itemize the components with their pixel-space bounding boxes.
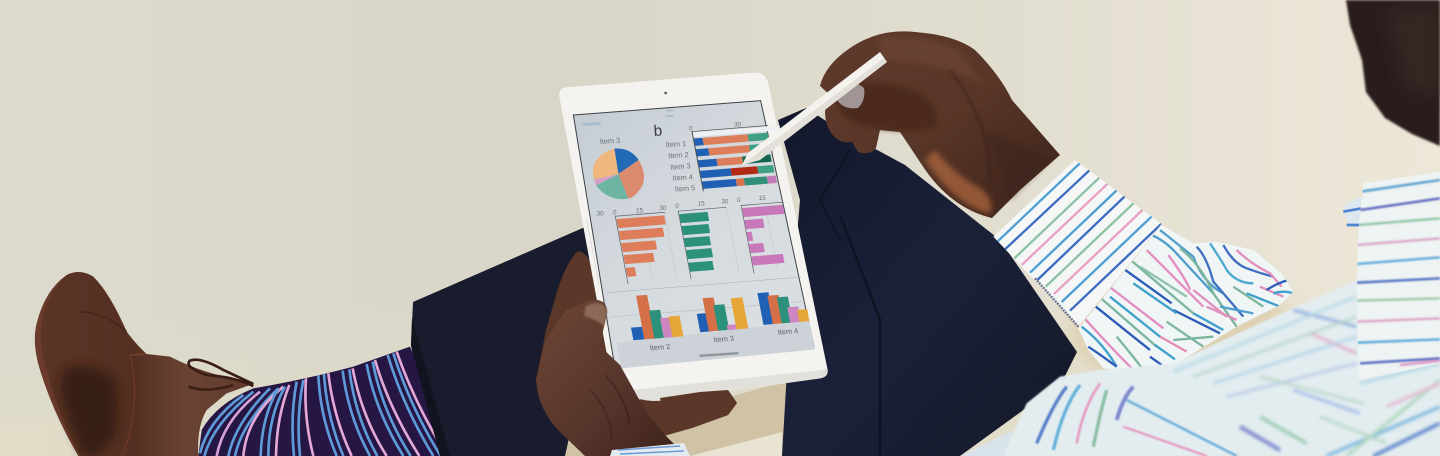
axis numbers: 30: [659, 205, 667, 212]
row labels: Item 5: [675, 183, 695, 194]
axis numbers: 0: [675, 203, 679, 210]
screen status: 10:41: [666, 108, 675, 113]
axis numbers: 15: [759, 195, 766, 202]
trouser hem over sock: [411, 318, 450, 456]
column labels: Item 3: [713, 334, 735, 344]
shirt: collar: [1343, 172, 1440, 380]
back of lower hand behind tablet: [536, 251, 737, 440]
screen status: Charts: [665, 114, 674, 118]
stacked horizontal bars: [691, 124, 790, 191]
axis numbers: 0: [737, 197, 741, 204]
heading letter b: b: [653, 122, 663, 140]
shoe sole: [35, 275, 85, 456]
shirt fragment at knee: [960, 431, 1014, 456]
page dots: [699, 352, 739, 357]
column labels: [648, 326, 800, 352]
front of lower hand: [536, 300, 737, 456]
trousers: upper leg and knee: [778, 108, 1077, 456]
pie chart: Item 3: [600, 136, 620, 146]
row labels: [666, 139, 695, 194]
axis numbers: 0: [689, 126, 693, 133]
column labels: Item 4: [777, 326, 799, 337]
trousers: lower leg: [411, 227, 600, 456]
sock with stripes: [198, 347, 450, 456]
screen status: [580, 108, 675, 127]
shoe lace: [189, 360, 253, 386]
row labels: Item 1: [666, 139, 686, 149]
row labels: Item 3: [670, 161, 691, 172]
column labels: Item 2: [649, 342, 671, 352]
stylus: [742, 52, 887, 165]
shoe: [35, 272, 253, 456]
axis numbers: 30: [597, 211, 604, 218]
axis numbers: 30: [721, 198, 729, 205]
axis numbers: [597, 122, 766, 218]
axis numbers: 0: [613, 209, 617, 216]
axis numbers: 15: [698, 201, 705, 208]
shoe upper: [41, 272, 250, 456]
tablet screen: [573, 101, 814, 368]
shirt: cuff and sleeve: [993, 153, 1293, 372]
orange horizontal bar chart: [586, 212, 678, 287]
shirt: foreground body (out of focus): [1003, 280, 1440, 456]
row labels: Item 4: [672, 172, 693, 183]
green horizontal bar chart: [678, 207, 739, 279]
axis numbers: 30: [734, 122, 742, 129]
hair and beard: [1346, 0, 1440, 146]
axis numbers: 15: [636, 207, 644, 214]
charts in screen perspective: [571, 124, 822, 369]
tablet: [559, 73, 828, 401]
pink horizontal bar chart: [741, 202, 795, 273]
row labels: Item 2: [668, 150, 689, 160]
cuff: [993, 153, 1163, 327]
pie chart: [593, 136, 644, 199]
tablet body: [559, 73, 828, 401]
column chart: [607, 277, 815, 368]
upper hand holding stylus: [820, 31, 1060, 218]
sleeve: [1078, 225, 1293, 372]
screen status: ‹ Numbers: [580, 121, 601, 127]
floor and warm wall glow: [0, 270, 1440, 456]
